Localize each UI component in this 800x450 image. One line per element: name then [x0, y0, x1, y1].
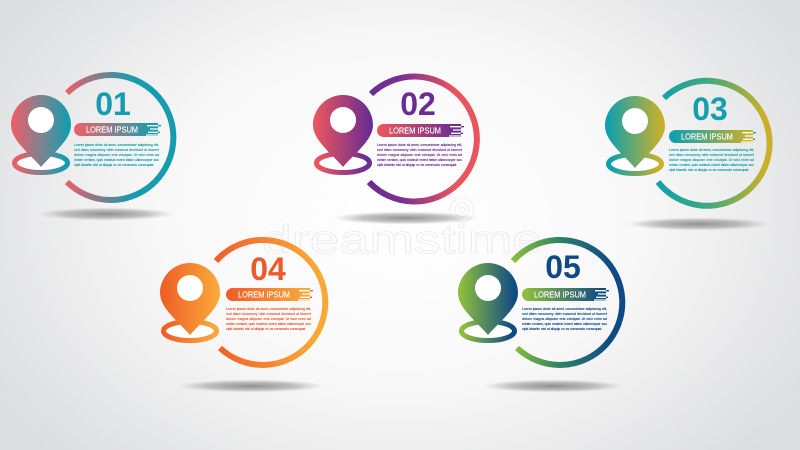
text block 01	[74, 143, 160, 167]
ring arc 04	[216, 240, 325, 365]
text block 04: minim veniam, quis nostrud exerci tation ullamcorper sus	[226, 322, 311, 326]
ring arc 05	[513, 240, 622, 365]
icon: map pin 05	[458, 263, 518, 340]
text block 03: dolore magna aliquam erat volutpat. Ut wisi enim ad	[669, 158, 754, 162]
icon: map pin 03	[605, 96, 665, 174]
text block 01: minim veniam, quis nostrud exerci tation ullamcorper sus	[74, 158, 159, 162]
shadow: step 03	[626, 218, 770, 230]
label bar 05: LOREM IPSUM	[534, 290, 586, 300]
text block 02: cipit lobortis nisl ut aliquip ex ea commodo consequat.	[377, 163, 457, 167]
shadow: step 05	[483, 380, 623, 392]
number 05: 05	[545, 249, 581, 285]
text block 01: Lorem ipsum dolor sit amet, consectetuer adipiscing elit,	[74, 143, 159, 147]
text block 03: sed diam nonummy nibh euismod tincidunt ut laoreet	[669, 153, 755, 157]
text block 04: cipit lobortis nisl ut aliquip ex ea commodo consequat.	[226, 327, 306, 331]
panel: step 02	[313, 77, 477, 202]
text block 03: Lorem ipsum dolor sit amet, consectetuer adipiscing elit,	[669, 148, 754, 152]
panel: step 03	[605, 81, 770, 206]
label bar 02	[377, 124, 464, 137]
text block 05: minim veniam, quis nostrud exerci tation ullamcorper sus	[522, 322, 607, 326]
ring arc 03	[658, 81, 770, 206]
text block 05: sed diam nonummy nibh euismod tincidunt ut laoreet	[522, 312, 608, 316]
text block 04: sed diam nonummy nibh euismod tincidunt ut laoreet	[226, 312, 312, 316]
text block 04: Lorem ipsum dolor sit amet, consectetuer adipiscing elit,	[226, 307, 311, 311]
ring arc 01	[67, 75, 173, 200]
text block 05: Lorem ipsum dolor sit amet, consectetuer adipiscing elit,	[522, 307, 607, 311]
number 03: 03	[692, 91, 728, 127]
label bar 01	[74, 123, 161, 136]
text block 05	[522, 307, 608, 331]
text block 05: cipit lobortis nisl ut aliquip ex ea commodo consequat.	[522, 327, 602, 331]
text block 02: dolore magna aliquam erat volutpat. Ut wisi enim ad	[377, 153, 462, 157]
watermark: dreamstime	[262, 218, 542, 262]
label bar 05	[522, 288, 609, 301]
text block 03	[669, 148, 755, 172]
shadow: step 01	[38, 208, 174, 220]
number 02: 02	[400, 86, 436, 122]
text block 02: Lorem ipsum dolor sit amet, consectetuer adipiscing elit,	[377, 143, 462, 147]
text block 02	[377, 143, 463, 167]
label bar 03	[669, 130, 756, 143]
number 01: 01	[95, 86, 131, 122]
text block 03: minim veniam, quis nostrud exerci tation ullamcorper sus	[669, 163, 754, 167]
panel: step 05	[458, 240, 622, 365]
number 04: 04	[250, 251, 286, 287]
label bar 02: LOREM IPSUM	[389, 126, 441, 136]
label bar 04: LOREM IPSUM	[238, 290, 290, 300]
ring arc 02	[369, 77, 477, 202]
text block 01: dolore magna aliquam erat volutpat. Ut wisi enim ad	[74, 153, 159, 157]
label bar 04	[226, 288, 313, 301]
text block 02: minim veniam, quis nostrud exerci tation ullamcorper sus	[377, 158, 462, 162]
shadow: step 02	[333, 212, 477, 224]
text block 03: cipit lobortis nisl ut aliquip ex ea commodo consequat.	[669, 168, 749, 172]
icon: map pin 01	[11, 95, 71, 172]
text block 01: sed diam nonummy nibh euismod tincidunt ut laoreet	[74, 148, 160, 152]
shadow: step 04	[178, 380, 324, 392]
text block 04	[226, 307, 312, 331]
watermark	[262, 198, 542, 262]
icon: map pin 02	[313, 95, 373, 172]
text block 01: cipit lobortis nisl ut aliquip ex ea commodo consequat.	[74, 163, 154, 167]
text block 05: dolore magna aliquam erat volutpat. Ut wisi enim ad	[522, 317, 607, 321]
panel: step 04	[160, 240, 325, 365]
label bar 03: LOREM IPSUM	[681, 132, 733, 142]
label bar 01: LOREM IPSUM	[86, 125, 138, 135]
text block 04: dolore magna aliquam erat volutpat. Ut wisi enim ad	[226, 317, 311, 321]
panel: step 01	[11, 75, 173, 200]
icon: map pin 04	[160, 263, 220, 340]
text block 02: sed diam nonummy nibh euismod tincidunt ut laoreet	[377, 148, 463, 152]
